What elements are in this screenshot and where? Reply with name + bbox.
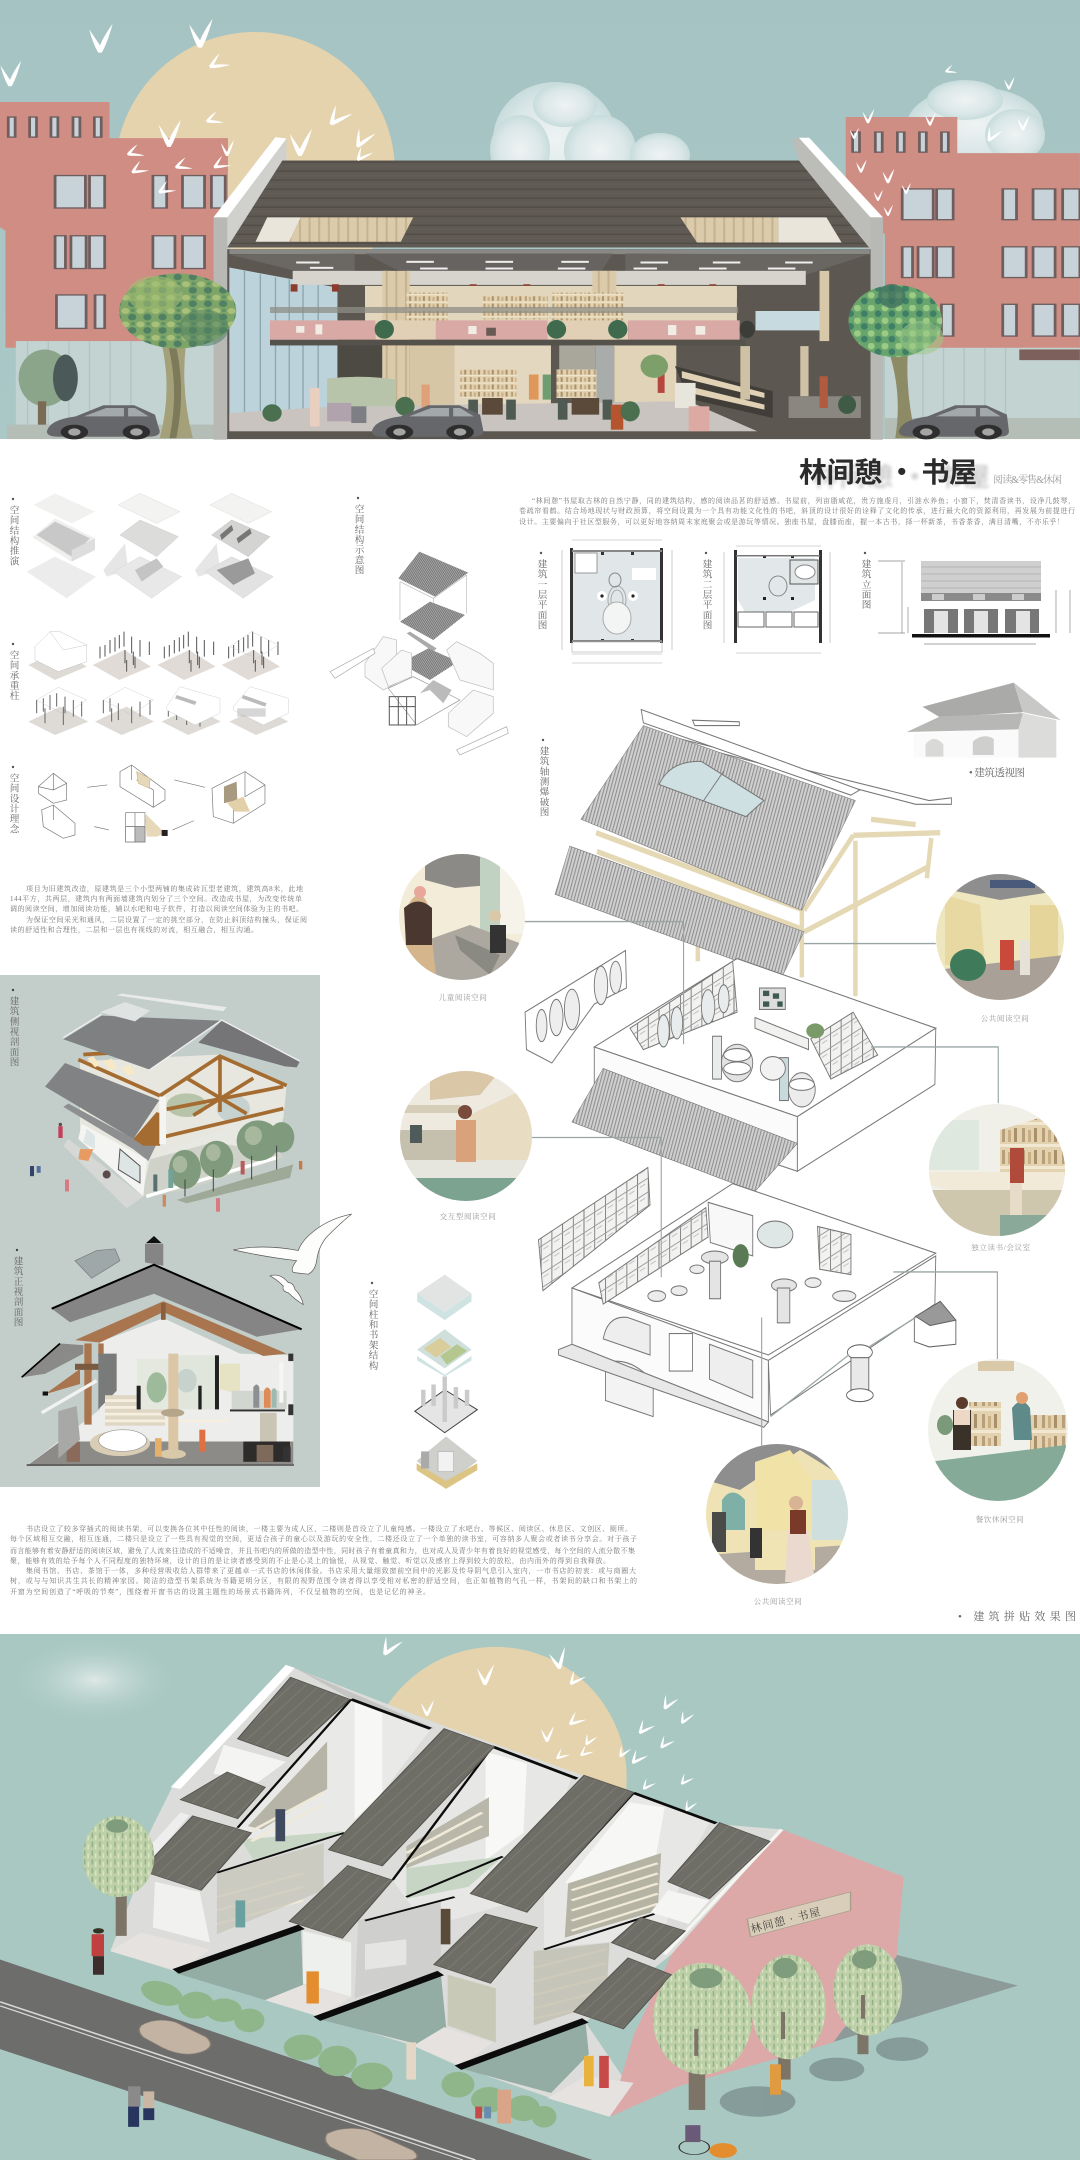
- middle roof: [572, 1068, 797, 1192]
- label: structure schematic: 空间结构示意图: [352, 503, 364, 576]
- callout: public reading space bottom: [706, 1444, 848, 1606]
- text block: project description: 项目为旧建筑改造，原建筑是三个小型两铺的集成砖瓦型老建筑，建筑高8米，此地: [26, 884, 303, 894]
- courtyards: [176, 1927, 589, 2093]
- mezzanine pink balcony: [270, 320, 755, 345]
- chart: first floor plan: [562, 540, 672, 663]
- callout: private study / meeting room: [929, 1104, 1065, 1252]
- icon: large birds: [233, 1214, 352, 1305]
- callout: public reading space: 公共阅读空间: [981, 1013, 1029, 1023]
- tree: right: [848, 284, 944, 438]
- diagram: stacked layers: [415, 1275, 477, 1489]
- diagram: structure schematic: [330, 552, 508, 755]
- ceiling: [229, 249, 870, 298]
- panel: grey section drawings: [0, 975, 320, 1487]
- birds: bottom: [378, 1633, 697, 1814]
- perspective small view: [907, 683, 1061, 758]
- text block: intro: “林间憩”书屋取古林的自然宁静，同的建筑结构，感的阅读品茗的舒适感。书屋前，列亩脂咸花，贵方施虔月，引涟水养鱼；小窗下，焚清香读书，设净几鼓琴，: [532, 496, 1075, 506]
- section building: [213, 137, 883, 440]
- callout: public reading space: [936, 874, 1064, 1023]
- sign text: 林间憩 · 书屋: [749, 1904, 823, 1936]
- text block: book shop description: [10, 1524, 637, 1597]
- main roof: [581, 709, 860, 910]
- callout: interactive reading space: 交互型阅读空间: [440, 1211, 496, 1221]
- label: second floor plan: 建筑二层平面图: [700, 558, 712, 631]
- cloud: right: [908, 80, 1045, 154]
- sun: [115, 32, 395, 312]
- text block: book shop description: 聚，能够有效的给予每个人不同程度的独特环境，设计的目的是让读者感受到的不止是心灵上的愉悦，从视觉、触觉、听觉以及感官上得到较大的放松，由内而外的得到自我释放。: [10, 1556, 610, 1566]
- callout: children's reading space: 儿童阅读空间: [439, 992, 487, 1002]
- lower roof: [555, 846, 804, 977]
- callout: interactive reading space: [400, 1071, 532, 1221]
- roofs: [141, 1677, 770, 2029]
- text block: book shop description: 书店设立了较多穿插式的阅读书架，可以变换各位其中任性的阅读，一楼主要为成人区，二楼则是首设立了儿童纯感。一楼设立了水吧台、等候区、阅读区、休息区、文创区、厕所。: [26, 1524, 632, 1534]
- ground: [0, 1634, 1080, 2160]
- title: 林间憩 · 书屋: [812, 457, 990, 494]
- building: left: [0, 102, 228, 439]
- middle floor: [594, 959, 936, 1171]
- title: 林间憩 · 书屋: [799, 451, 977, 491]
- rooms interior: [153, 1699, 709, 2042]
- diagram: front section building: [22, 1236, 302, 1466]
- walls: [213, 217, 883, 440]
- text block: project description: 调的阅读空间，增加阅读功能，辅以水吧和电子软件，打造以阅读空间体验为主的书吧。: [10, 904, 303, 914]
- tree: left background: [19, 349, 78, 425]
- panel: top section scene: [0, 0, 1080, 440]
- label: column and shelf structure: 空间柱和书架结构: [366, 1288, 378, 1371]
- text block: book shop description: 而言能够有着安静舒适的阅读区域，避免了人流来往造成的不适噪音，并且书吧内的所做的造型中性，同时孩子有着童真和力，也对成人及青少年有着良好的视觉感受，每个空间的人流分散不集: [10, 1546, 635, 1556]
- gable shadow: [826, 1954, 1018, 2044]
- roof: [227, 161, 869, 247]
- detached elements: [846, 1301, 956, 1402]
- label: collage rendering: • 建筑拼贴效果图: [958, 1609, 1076, 1623]
- building: right: [846, 117, 1080, 439]
- text block: book shop description: 集阅书馆、书店、茶馆于一体，多种经营吸收给人群带来了更越卓一式书店的休闲体验。书店采用大量细致窗前空间中的光影及传导阴气息引入室内，一市书店的初衷：或与商圈大: [26, 1566, 636, 1576]
- text block: project description: 为保证空间采光和通风，二层设置了一定的挑空部分，在防止斜顶结构撞头，保证阅: [26, 915, 307, 925]
- cars: [47, 405, 1009, 439]
- text block: project description: 读的舒适性和合理性，二层和一层也有视线的对流，相互融合，相互沟通。: [10, 925, 258, 935]
- curved wall: [525, 951, 626, 1063]
- label: design concept: 空间设计理念: [8, 772, 19, 834]
- callout: children's reading space: [399, 854, 525, 1002]
- label: elevation: 建筑立面图: [860, 558, 871, 610]
- diagram: exploded axonometric: [516, 683, 1061, 1447]
- callout: dining and leisure space: 餐饮休闲空间: [976, 1514, 1024, 1524]
- gable wall: [609, 1829, 904, 2117]
- tree: left: [119, 274, 236, 438]
- label: structure deduction: 空间结构推演: [8, 504, 19, 566]
- glow: [5, 1635, 185, 1725]
- base slab: [227, 431, 871, 439]
- chart: elevation: [878, 561, 1070, 644]
- birds: [0, 19, 1029, 216]
- diagram: design concept: [38, 765, 265, 842]
- furniture and people: [262, 354, 856, 430]
- sky: [0, 0, 1080, 439]
- tree shadows: [720, 2037, 928, 2117]
- text block: project description: [10, 884, 307, 935]
- subtitle: 阅读&零售&休闲: [993, 473, 1062, 486]
- sun: [365, 1647, 627, 1911]
- trees: willows: [83, 1816, 902, 2110]
- callout: private study / meeting room: 独立读书/会议室: [971, 1242, 1031, 1252]
- cloud: centre: [490, 82, 690, 160]
- label: exploded axonometric: 建筑轴测爆破图: [538, 745, 549, 818]
- building body: [110, 1665, 782, 2117]
- label: side section: 建筑侧视剖面图: [8, 995, 19, 1068]
- panel: bottom collage scene: [0, 1633, 1080, 2160]
- text block: book shop description: 开窗为空间创造了“呼吸的节奏”，围绕着开窗书店的设置主题性的场景式书籍阵列，不仅呈植物的空间，也是记忆的神圣。: [10, 1587, 430, 1597]
- road: [0, 1960, 592, 2160]
- cars: [139, 2020, 417, 2160]
- text block: intro: 设计。主要偏向于社区型服务，可以更好地容纳周末家庭聚会或是游玩等情况。独座书屋，盘膝而座，握一本古书，择一杯新茶，书香茶香，满目清嘴，不亦乐乎！: [519, 517, 1064, 527]
- callout: dining and leisure space: [928, 1359, 1068, 1524]
- label: front section: 建筑正视剖面图: [12, 1255, 23, 1328]
- label: first floor plan: 建筑一层平面图: [536, 558, 547, 631]
- people: [92, 1809, 781, 2158]
- text block: book shop description: 每个区域相互交融，相互连通，二楼只是设立了一些具有视觉的空间，更适合孩子的童心以及游玩的安全性，二楼还设立了一个单独的读书室，可容纳多人聚会或者读书分享会。对于孩子: [10, 1534, 637, 1544]
- interior base: [227, 249, 871, 439]
- text block: project description: 144平方，共两层，建筑内有两面墙建筑内划分了三个空间。改造成书屋，为改变传统单: [10, 894, 302, 904]
- gable strips: [213, 137, 883, 254]
- skylights: [256, 217, 842, 242]
- ground floor: [538, 1167, 936, 1427]
- diagram: load-bearing columns: [28, 632, 288, 735]
- text block: intro: 卷疏帘看鹤。结合场地现状与财政预算，将空间设置为一个具有功能文化性的书吧，斜顶的设计很好的诠释了文化的传承，进行最大化的资源利用，再发展为前提进行: [519, 506, 1075, 516]
- black floor edges: [176, 1699, 716, 2068]
- sign board: [747, 1892, 851, 1937]
- connector lines: [516, 922, 998, 1447]
- label: perspective: • 建筑透视图: [969, 766, 1025, 779]
- hedges: [133, 1977, 556, 2128]
- diagram: side section building: [30, 994, 302, 1212]
- upper bookshelves: [270, 271, 829, 346]
- label: load-bearing columns: 空间承重柱: [8, 649, 19, 701]
- ridge wall: [134, 1665, 434, 1872]
- ground floor interior: [229, 345, 861, 433]
- diagram: structure deduction: [27, 493, 273, 598]
- text block: book shop description: 树，或与与知识共生共长的精神家园。简洁的造型书架系统为书籍更明分区，有限的视野范围令读者得以享受相对私密的舒适空间，也正如植物的气孔一样，书架间的缺口和书架上的: [10, 1576, 637, 1586]
- chart: second floor plan: [724, 546, 830, 653]
- glass wall: [229, 268, 337, 430]
- callout: public reading space bottom: 公共阅读空间: [754, 1596, 802, 1606]
- roof back: [648, 720, 951, 804]
- steps: [110, 1933, 634, 2117]
- timber frame: [596, 819, 940, 996]
- text block: intro: [519, 496, 1075, 527]
